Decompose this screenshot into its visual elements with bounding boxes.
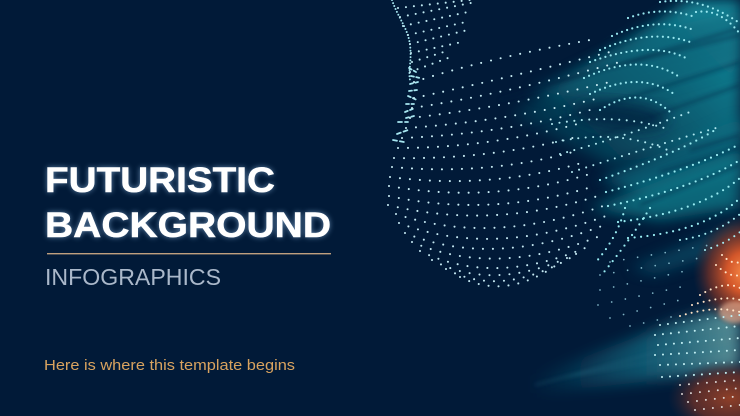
title text: BACKGROUND — [45, 206, 331, 245]
title text — [45, 161, 331, 245]
teal light streaks upper right — [500, 0, 740, 220]
dots: ember area — [680, 380, 740, 410]
dots: lower bowl — [396, 205, 606, 286]
tagline: Here is where this template begins — [44, 357, 295, 374]
title — [45, 161, 331, 245]
title glow: BACKGROUND — [45, 206, 331, 245]
orange glow — [668, 214, 740, 416]
dots: right edge — [680, 214, 740, 250]
dots: hot core — [680, 255, 740, 316]
dots: lower band — [655, 315, 740, 377]
teal light streaks mid right — [630, 222, 740, 274]
lower streaks — [530, 304, 740, 394]
dots: left bright edge — [392, 0, 420, 142]
dots: upper right scales — [584, 1, 740, 112]
dots: sparse field — [598, 245, 710, 326]
dots: upper lobe — [398, 0, 476, 72]
divider line — [47, 253, 331, 254]
subtitle: INFOGRAPHICS — [45, 264, 221, 290]
title glow — [45, 161, 331, 245]
dots: central mesh — [388, 40, 620, 216]
dots: lower right dense band — [596, 130, 740, 272]
dots: mid right dark band — [552, 112, 716, 172]
title glow: FUTURISTIC — [45, 161, 275, 200]
particle mesh — [388, 0, 740, 410]
title text: FUTURISTIC — [45, 161, 275, 200]
